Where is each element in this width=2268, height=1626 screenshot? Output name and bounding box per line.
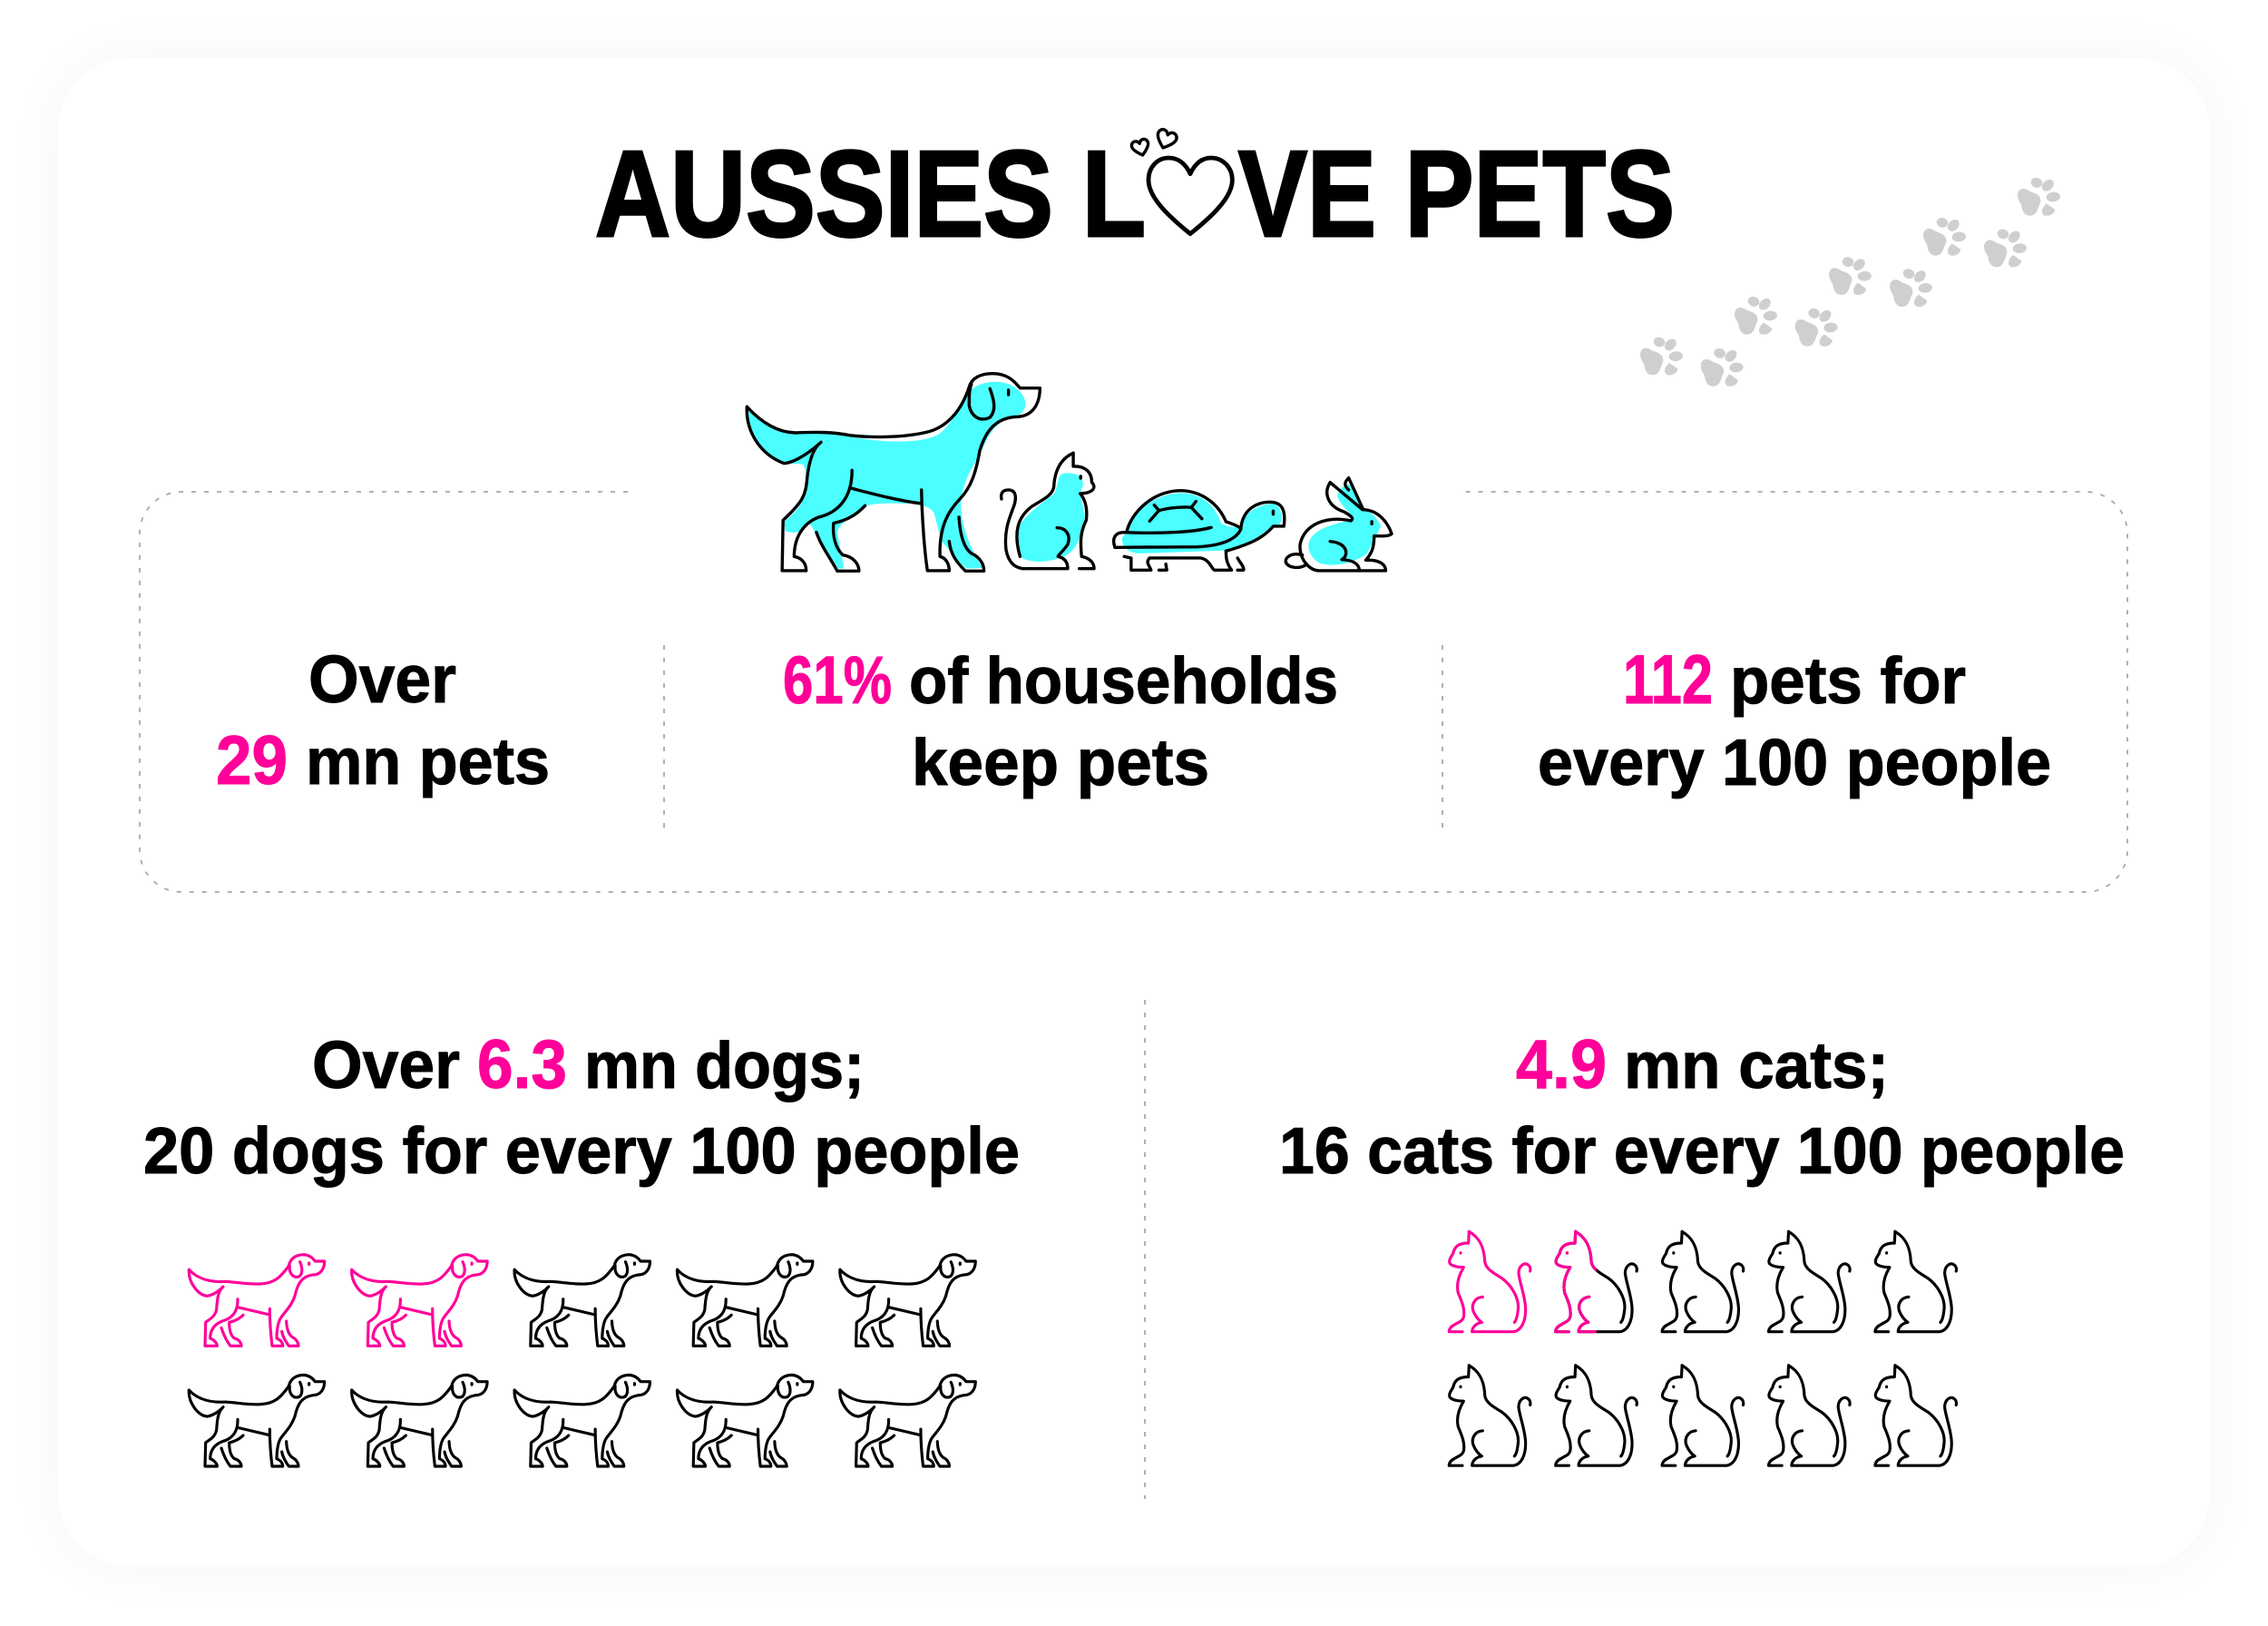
stat: over 29 mn pets: 29	[216, 722, 288, 799]
title second part: VE PETS	[1238, 125, 1675, 262]
icon: big dog	[747, 374, 1040, 571]
stat: 61% of households keep pets: keep pets	[912, 727, 1209, 799]
icon: heart replacing the O	[1149, 158, 1232, 234]
heading: dogs: mn dogs;	[584, 1030, 865, 1102]
icon: paw print trail	[1640, 177, 2060, 387]
title	[595, 125, 1675, 262]
icon: big rabbit	[1286, 478, 1392, 571]
stat: over 29 mn pets: mn pets	[306, 726, 550, 798]
heading: dogs	[143, 1026, 1020, 1188]
stat: over 29 mn pets: Over	[308, 642, 456, 717]
panel: dashed stats frame	[140, 492, 2127, 892]
stat: 61% of households keep pets	[783, 642, 1338, 799]
heading: cats	[1279, 1026, 2125, 1188]
pictogram: 10 cats, 1.6 highlighted	[1449, 1231, 1956, 1465]
title: AUSSIES L	[595, 125, 1146, 262]
icon: big turtle	[1114, 491, 1285, 570]
heading: cats: 4.9	[1516, 1026, 1607, 1103]
illustration: dog, cat, turtle and rabbit	[747, 374, 1392, 571]
icon: small heart left	[1130, 138, 1150, 157]
icon: big cat	[1002, 453, 1094, 569]
pictogram: 10 dogs, 2 highlighted	[189, 1255, 975, 1466]
stat: 61% of households keep pets: 61%	[783, 642, 892, 718]
heading: dogs: 6.3	[477, 1026, 567, 1103]
heading: cats: 16 cats for every 100 people	[1279, 1115, 2125, 1188]
stat: 112 pets for every 100 people: 112	[1623, 642, 1713, 719]
stat: 61% of households keep pets: of households	[909, 645, 1338, 718]
icon: small heart right	[1154, 128, 1178, 152]
heading: dogs: Over	[312, 1027, 460, 1102]
infographic artwork	[139, 127, 2128, 1499]
stat: over 29 mn pets	[216, 642, 550, 799]
stat: 112 pets for every 100 people	[1538, 642, 2051, 799]
stat: 112 pets for every 100 people: pets for	[1730, 645, 1966, 718]
heading: cats: mn cats;	[1624, 1030, 1889, 1102]
stat: 112 pets for every 100 people: every 100 people	[1538, 727, 2051, 799]
heading: dogs: 20 dogs for every 100 people	[143, 1115, 1020, 1188]
